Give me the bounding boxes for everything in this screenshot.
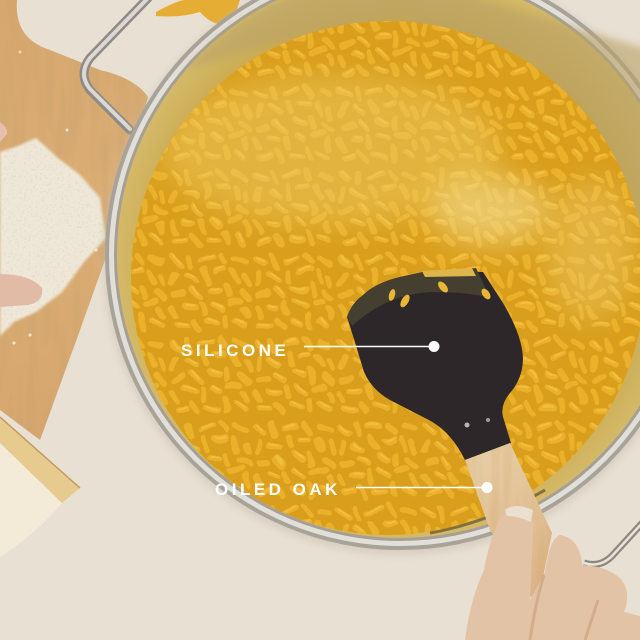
burnt edge line xyxy=(430,90,610,533)
pot handle top left xyxy=(84,0,150,130)
fingers at left edge xyxy=(0,122,42,307)
grated parmesan pile xyxy=(0,50,110,344)
spatula xyxy=(347,268,560,610)
label: oiled oak: OILED OAK xyxy=(215,480,341,499)
risotto xyxy=(131,21,640,535)
pot rim xyxy=(105,0,640,550)
pot xyxy=(100,0,640,560)
parmesan wedge xyxy=(0,417,80,557)
silicone head xyxy=(347,272,523,460)
rice smear on spatula tip xyxy=(347,268,490,326)
cutting board xyxy=(0,0,150,440)
hand holding handle xyxy=(465,506,640,640)
pot shadow xyxy=(103,0,640,555)
oiled oak handle xyxy=(465,443,552,607)
saffron garnish behind pot xyxy=(156,0,240,25)
inner wall xyxy=(117,0,640,538)
label: silicone: SILICONE xyxy=(181,341,289,360)
pot handle bottom right xyxy=(584,520,640,564)
label: oiled oak xyxy=(215,480,492,499)
grains on spatula xyxy=(388,280,492,309)
label: silicone xyxy=(181,341,440,360)
